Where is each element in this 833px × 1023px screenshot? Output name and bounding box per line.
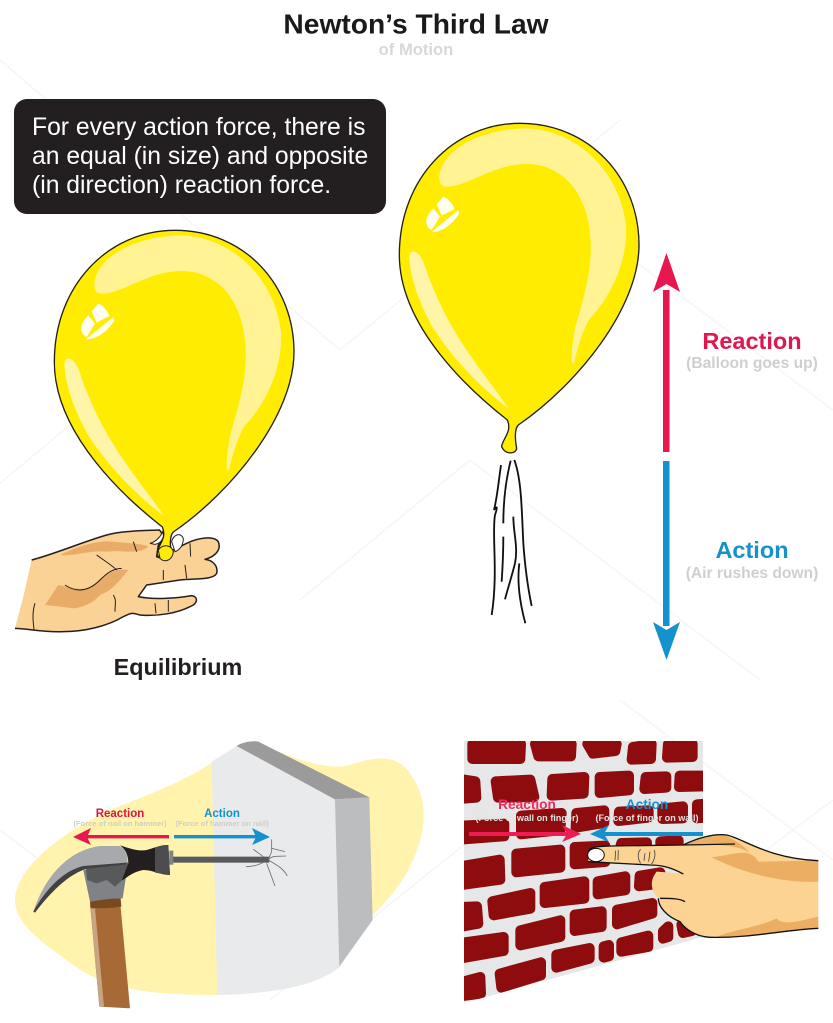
arrow: action down (653, 461, 680, 660)
label: reaction: Reaction (702, 328, 802, 354)
wall (212, 741, 373, 995)
balloon: equilibrium (54, 230, 294, 560)
arrow: finger action (590, 825, 703, 842)
label: action: Action (715, 537, 789, 563)
label: reaction: (Balloon goes up) (686, 355, 818, 372)
callout: definition: (in direction) reaction force. (32, 172, 331, 199)
label: reaction (686, 328, 818, 372)
yellow backdrop (15, 742, 424, 995)
label: action (686, 537, 818, 582)
bricks (460, 744, 707, 996)
label: action: (Air rushes down) (686, 565, 818, 582)
label: hammer reaction: (Force of nail on hammer) (73, 819, 167, 828)
label: hammer action: (Force of hammer on nail) (175, 819, 269, 828)
scene: brick wall and finger (460, 741, 818, 1003)
callout: definition (14, 99, 386, 214)
hand (588, 835, 818, 937)
balloon: deflating (399, 123, 639, 453)
label: hammer reaction: Reaction (96, 808, 144, 820)
arrow: hammer reaction (73, 828, 169, 845)
label: hammer action (175, 808, 269, 828)
label: wall reaction (475, 797, 579, 823)
label: finger action: Action (626, 797, 668, 812)
label: finger action (595, 797, 699, 823)
arrow: wall reaction (469, 825, 581, 842)
label: hammer action: Action (204, 808, 240, 820)
arrow: reaction up (653, 253, 680, 452)
label: wall reaction: Reaction (498, 797, 556, 812)
label: hammer reaction (73, 808, 167, 828)
hammer (33, 845, 173, 1008)
callout: definition: For every action force, there is (32, 114, 365, 141)
wall backing (464, 741, 703, 1003)
label: wall reaction: (Force of wall on finger) (475, 813, 579, 823)
title: Newton’s Third Law (283, 8, 549, 40)
hand holding balloon (15, 530, 219, 632)
nail and cracks (170, 839, 287, 886)
arrow: hammer action (174, 828, 270, 845)
scene: hammer and nail (15, 741, 424, 1008)
subtitle: of Motion (379, 40, 453, 59)
label: finger action: (Force of finger on wall) (595, 813, 699, 823)
air rushing out lines (492, 460, 532, 623)
label: equilibrium: Equilibrium (114, 654, 242, 680)
callout: definition: an equal (in size) and opposite (32, 143, 368, 170)
